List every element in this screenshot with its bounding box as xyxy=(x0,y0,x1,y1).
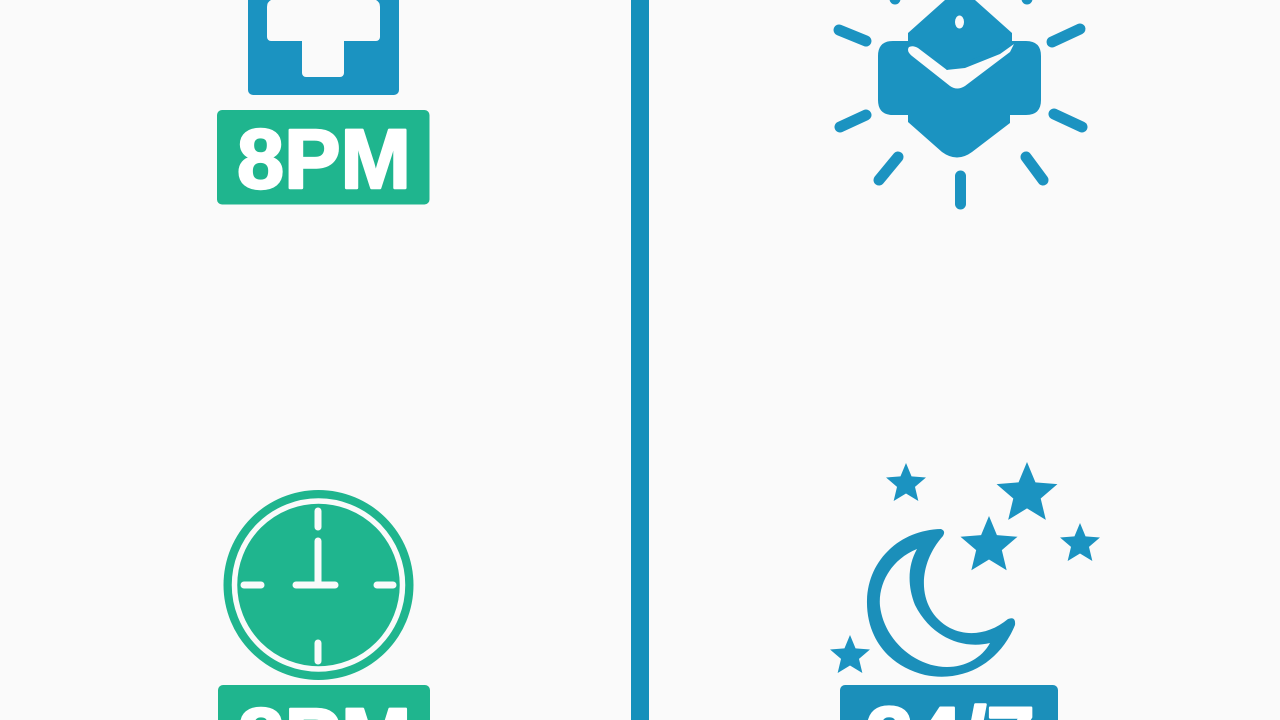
clock body xyxy=(878,0,1041,158)
icon: sun clock xyxy=(839,0,1082,204)
icon: blue square with white cross xyxy=(248,0,399,95)
vertical divider xyxy=(631,0,649,720)
sun rays xyxy=(839,0,1082,204)
clock hands xyxy=(908,44,1014,88)
clock dot xyxy=(955,16,964,28)
label: 8PM top: 8PM xyxy=(237,112,411,206)
star 3 xyxy=(960,516,1018,570)
icon: green clock xyxy=(224,490,414,680)
icon: moon and stars xyxy=(830,462,1100,677)
clock ticks and hands xyxy=(244,511,393,661)
star 5 xyxy=(830,635,870,673)
moon xyxy=(867,529,1015,677)
star 1 xyxy=(886,463,926,501)
label: 24/7 xyxy=(840,685,1058,720)
label: 8PM bottom xyxy=(218,685,430,720)
star 2 xyxy=(997,462,1057,520)
star 4 xyxy=(1060,523,1100,561)
